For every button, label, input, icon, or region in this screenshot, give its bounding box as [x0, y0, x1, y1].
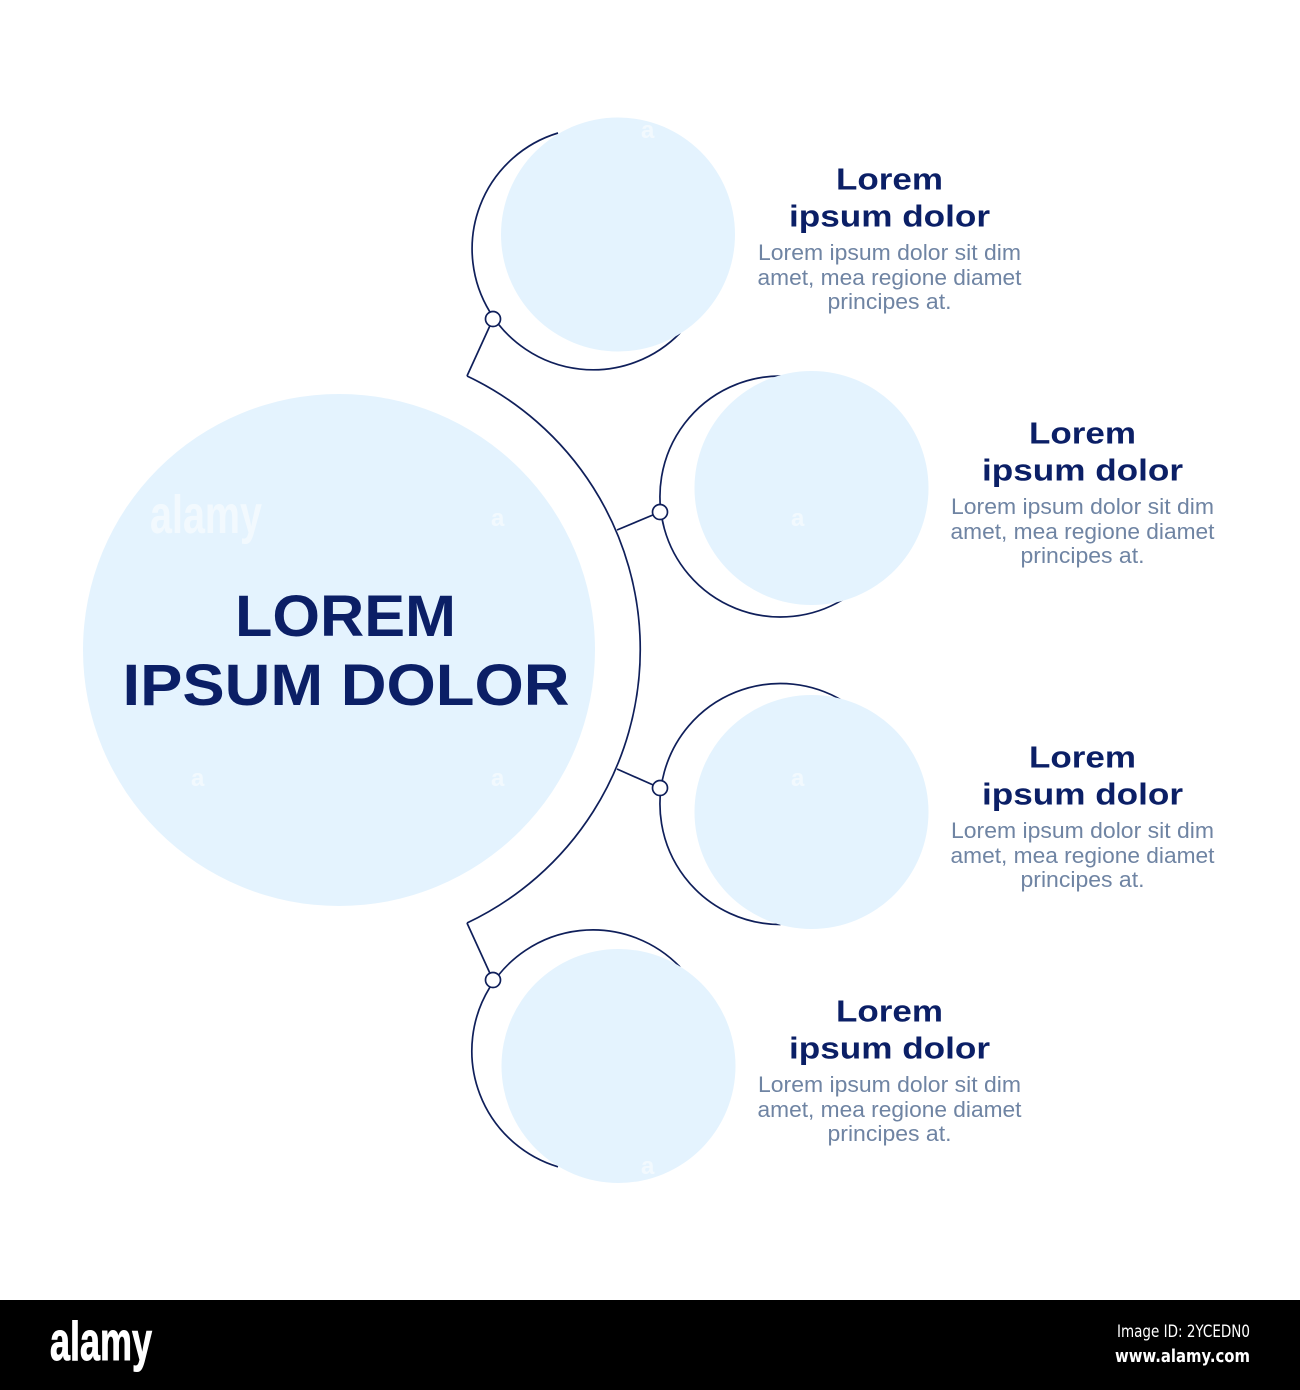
body text 4: amet, mea regione diamet	[758, 1097, 1022, 1122]
heading 2: ipsum dolor	[982, 452, 1183, 488]
connector 1	[467, 319, 493, 376]
body text 1: Lorem ipsum dolor sit dim	[758, 240, 1021, 265]
heading 3: Lorem	[1029, 740, 1136, 774]
heading 4: Lorem	[836, 994, 943, 1028]
heading 4: ipsum dolor	[789, 1030, 990, 1066]
filled circle 1	[501, 118, 735, 352]
footer bar	[0, 1300, 1300, 1390]
outline ring 3	[660, 684, 842, 924]
body text 4: Lorem ipsum dolor sit dim	[758, 1072, 1021, 1097]
outline ring 1	[472, 133, 680, 370]
outline ring 2	[660, 376, 842, 617]
faint watermarks: a	[791, 505, 805, 532]
body text 4: principes at.	[828, 1121, 952, 1146]
body text 3: amet, mea regione diamet	[950, 843, 1214, 868]
body text 2: Lorem ipsum dolor sit dim	[951, 494, 1214, 519]
faint watermarks	[150, 117, 805, 1180]
panel: item 3	[617, 684, 1214, 929]
footer url: www.alamy.com	[1115, 1346, 1250, 1367]
node 1	[486, 312, 500, 326]
panel: item 4	[467, 923, 1022, 1183]
central heading: IPSUM DOLOR	[122, 653, 570, 718]
main connecting arc	[467, 376, 640, 923]
faint watermarks: alamy	[150, 485, 262, 545]
footer image id: Image ID: 2YCEDN0	[1117, 1322, 1250, 1342]
faint watermarks: a	[191, 765, 205, 792]
heading 2: Lorem	[1029, 416, 1136, 450]
body text 2: amet, mea regione diamet	[950, 519, 1214, 544]
body text 3: principes at.	[1020, 867, 1144, 892]
heading 1: Lorem	[836, 162, 943, 196]
filled circle 3	[694, 695, 928, 929]
connector 2	[617, 512, 660, 530]
body text 2: principes at.	[1020, 543, 1144, 568]
outline ring 4	[472, 930, 680, 1167]
node 3	[652, 780, 668, 796]
panel: item 1	[467, 118, 1022, 376]
node 2	[652, 504, 668, 520]
footer logo: alamy	[50, 1310, 152, 1372]
body text 3: Lorem ipsum dolor sit dim	[951, 818, 1214, 843]
connector 3	[617, 769, 660, 788]
connector 4	[467, 923, 493, 980]
faint watermarks: a	[641, 117, 655, 144]
node 4	[486, 972, 500, 988]
heading 3: ipsum dolor	[982, 776, 1183, 812]
central heading: LOREM	[235, 584, 456, 649]
faint watermarks: a	[491, 505, 505, 532]
faint watermarks: a	[491, 765, 505, 792]
filled circle 4	[502, 949, 736, 1183]
body text 1: principes at.	[828, 289, 952, 314]
panel: item 2	[617, 371, 1214, 617]
faint watermarks: a	[791, 765, 805, 792]
body text 1: amet, mea regione diamet	[758, 265, 1022, 290]
heading 1: ipsum dolor	[789, 198, 990, 234]
central topic circle	[83, 394, 595, 906]
faint watermarks: a	[641, 1153, 655, 1180]
filled circle 2	[694, 371, 928, 605]
